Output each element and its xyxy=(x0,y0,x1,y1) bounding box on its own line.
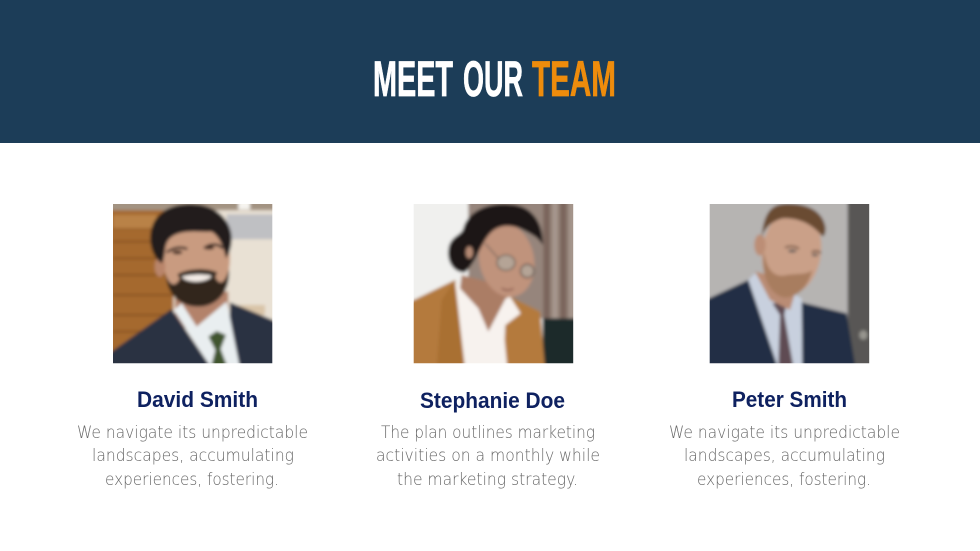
photo: David Smith xyxy=(113,204,272,364)
photo: Stephanie Doe xyxy=(414,204,574,364)
blazer xyxy=(407,280,545,368)
neck and face xyxy=(755,272,798,310)
description: Stephanie Doe: the marketing strategy. xyxy=(397,470,578,490)
face xyxy=(161,228,232,287)
description: Stephanie Doe: The plan outlines marketing xyxy=(381,423,595,443)
neck xyxy=(175,292,228,328)
beard xyxy=(763,253,812,298)
hair xyxy=(150,204,232,263)
name: Peter Smith: Peter Smith xyxy=(732,387,847,412)
suit xyxy=(702,280,856,368)
beard xyxy=(166,269,229,307)
header band xyxy=(0,0,980,143)
title: MEET xyxy=(373,51,453,107)
shirt xyxy=(455,281,521,368)
glasses xyxy=(485,243,498,258)
description: David Smith: landscapes, accumulating xyxy=(92,446,294,466)
title: TEAM xyxy=(532,51,616,107)
name: Stephanie Doe: Stephanie Doe xyxy=(420,388,565,413)
tie xyxy=(772,302,794,368)
description: Peter Smith: experiences, fostering. xyxy=(697,470,871,490)
title: OUR xyxy=(463,51,523,107)
photo: Peter Smith xyxy=(710,204,870,364)
hair xyxy=(762,204,826,237)
description: David Smith: We navigate its unpredictable xyxy=(77,423,308,443)
panel: David Smith xyxy=(77,198,313,490)
description: Peter Smith: We navigate its unpredictable xyxy=(669,423,900,443)
shirt xyxy=(174,302,240,368)
description: Stephanie Doe: activities on a monthly while xyxy=(376,446,600,466)
panel: Stephanie Doe xyxy=(376,198,605,490)
description: Peter Smith: landscapes, accumulating xyxy=(684,446,885,466)
neck xyxy=(460,275,507,332)
hair xyxy=(448,204,543,272)
description: David Smith: experiences, fostering. xyxy=(105,470,279,490)
face xyxy=(476,224,536,298)
shirt xyxy=(748,273,802,368)
tie xyxy=(208,331,228,368)
suit xyxy=(113,301,272,364)
name: David Smith: David Smith xyxy=(137,387,258,412)
panel: Peter Smith xyxy=(669,198,905,490)
